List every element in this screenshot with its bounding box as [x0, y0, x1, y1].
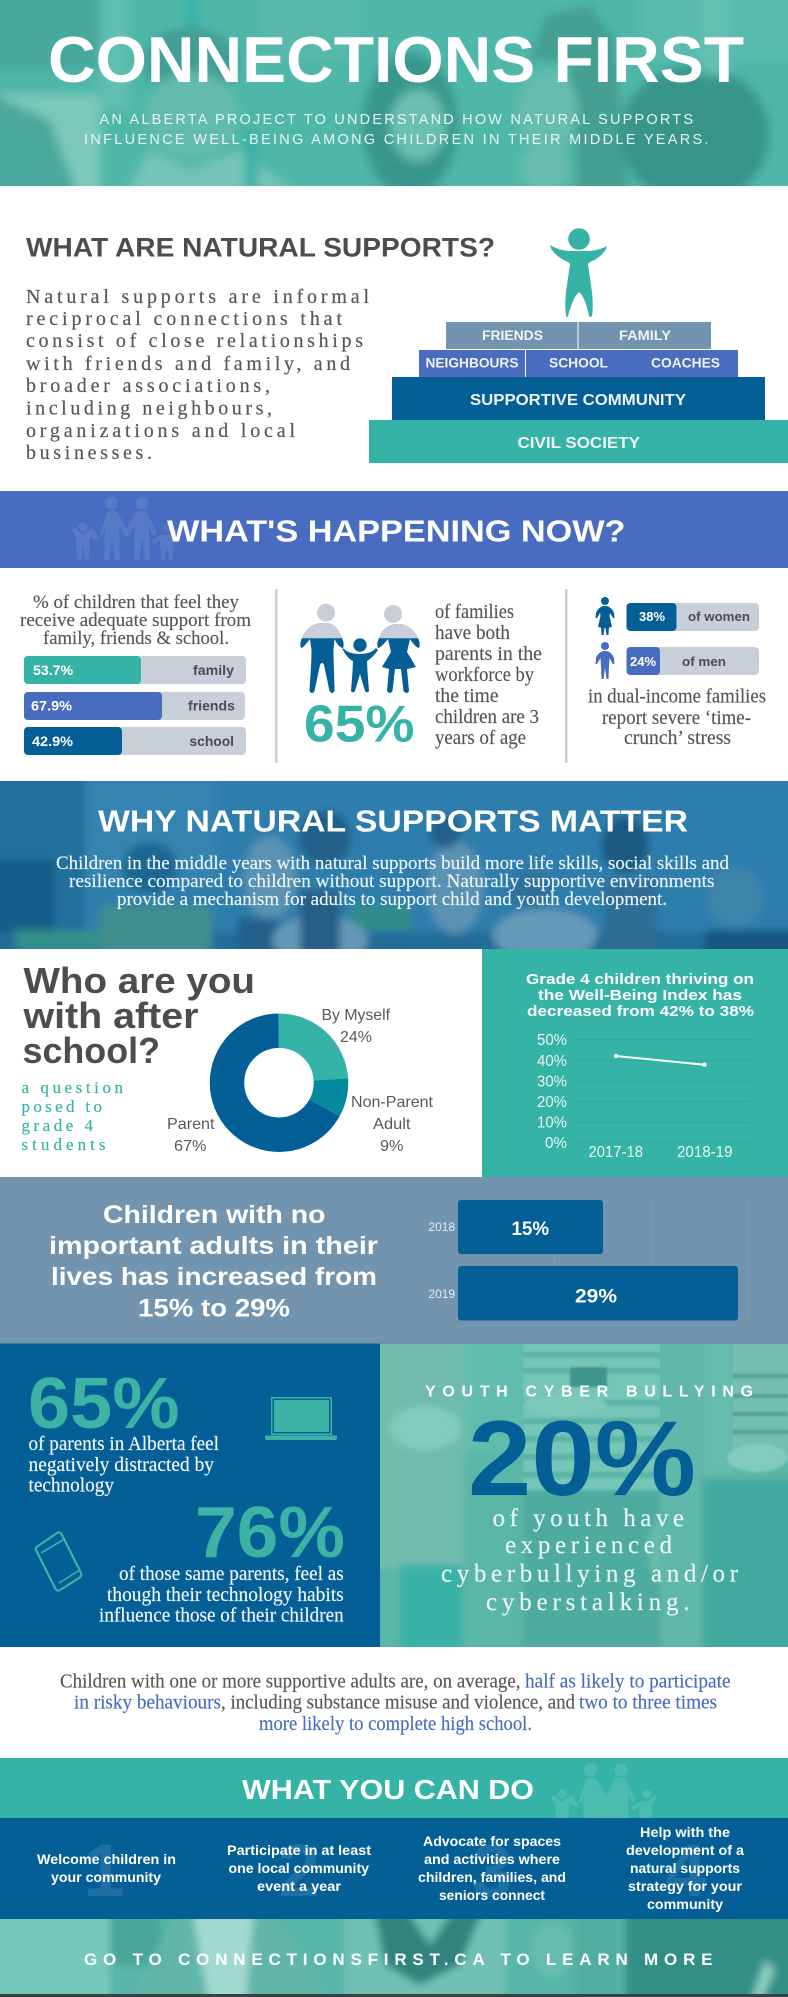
description: the time [435, 686, 498, 707]
action 1 [37, 1851, 176, 1885]
definition text: organizations and local [26, 420, 295, 442]
question note [22, 1078, 124, 1154]
heading: WHAT ARE NATURAL SUPPORTS? [26, 232, 495, 262]
bar: school: school [190, 734, 234, 749]
call to action: GO TO CONNECTIONSFIRST.CA TO LEARN MORE [84, 1950, 712, 1969]
bar chart: 2019 [428, 1289, 455, 1301]
support pyramid: SCHOOL [549, 356, 608, 370]
action 4: strategy for your [628, 1878, 743, 1894]
body text: resilience compared to children without support. Naturally supportive environments [69, 872, 714, 892]
cyber bullying photo background [380, 1344, 788, 1647]
bar: family: family [193, 663, 235, 678]
bar: friends: 67.9% [31, 698, 72, 714]
why section photo background [0, 781, 788, 949]
text: technology habits: of those same parents, feel as [119, 1564, 344, 1585]
description: cyberbullying and/or [441, 1560, 739, 1588]
text: technology habits: influence those of their children [99, 1606, 344, 1626]
statement: important adults in their [49, 1232, 378, 1260]
bar: family [24, 656, 246, 684]
stat: 20%: 20% [468, 1398, 696, 1518]
text: distracted: of parents in Alberta feel [28, 1434, 220, 1455]
bar: women: 38% [639, 609, 665, 624]
text block: supportive adults outcome: more likely to complete high school. [259, 1714, 532, 1735]
action 2: Participate in at least [227, 1842, 371, 1858]
question note: a question [22, 1078, 124, 1097]
subtitle: AN ALBERTA PROJECT TO UNDERSTAND HOW NATURAL SUPPORTS [100, 112, 693, 128]
text: distracted: negatively distracted by [28, 1455, 214, 1476]
panel: well-being index line chart [482, 949, 788, 1177]
statement: 15% to 29% [138, 1294, 290, 1322]
support pyramid: FRIENDS [482, 328, 543, 343]
donut labels: Adult [373, 1116, 411, 1133]
definition text: Natural supports are informal [26, 286, 369, 308]
definition text: reciprocal connections that [26, 308, 342, 330]
statement: lives has increased from [51, 1263, 377, 1291]
description: report severe ‘time- [602, 708, 751, 729]
body text [56, 854, 730, 910]
question note: posed to [22, 1097, 102, 1116]
chart axis labels: 40% [537, 1053, 567, 1070]
donut labels: By Myself [322, 1007, 391, 1024]
heading: WHAT'S HAPPENING NOW? [167, 514, 626, 548]
action 4: community [647, 1896, 723, 1912]
support pyramid: COACHES [651, 356, 720, 370]
definition text [26, 286, 369, 464]
statement [49, 1201, 378, 1322]
definition text: with friends and family, and [26, 353, 350, 375]
text block: supportive adults outcome: , including substance misuse and violence, and [221, 1692, 575, 1714]
icon: family with workforce fill [300, 604, 420, 693]
definition text: businesses. [26, 442, 152, 464]
heading: WHY NATURAL SUPPORTS MATTER [98, 805, 688, 839]
description: cyberstalking. [486, 1589, 690, 1616]
chart heading: Grade 4 children thriving on [526, 971, 754, 988]
description: of youth have [492, 1505, 684, 1532]
description: parents in the [435, 644, 542, 665]
subtitle: INFLUENCE WELL-BEING AMONG CHILDREN IN THEIR MIDDLE YEARS. [84, 132, 708, 148]
donut labels: 67% [174, 1138, 206, 1155]
bar: school [24, 727, 246, 755]
chart axis labels: 0% [545, 1135, 567, 1152]
icon: family watermark [551, 1764, 657, 1818]
panel: header banner [0, 0, 788, 186]
action 4: natural supports [630, 1860, 740, 1876]
action 4: development of a [626, 1842, 744, 1858]
support pyramid: SUPPORTIVE COMMUNITY [470, 392, 687, 409]
definition text: broader associations, [26, 375, 270, 397]
subtitle [84, 112, 708, 148]
panel: why natural supports matter [0, 781, 788, 949]
text block: supportive adults outcome: Children with one or more supportive adults are, on average, [60, 1672, 520, 1692]
bar: friends [24, 692, 245, 720]
panel: working parents [300, 602, 542, 754]
heading [22, 960, 255, 1071]
support pyramid [369, 322, 788, 463]
icon: laptop [265, 1397, 337, 1440]
description: in dual-income families [588, 686, 766, 708]
support pyramid: CIVIL SOCIETY [518, 435, 641, 452]
panel: what are natural supports [26, 228, 788, 464]
donut labels [167, 1007, 434, 1155]
bar chart: 29% [575, 1286, 617, 1308]
heading: with after [22, 995, 198, 1036]
heading: WHAT YOU CAN DO [242, 1774, 534, 1805]
heading: Who are you [24, 960, 255, 1001]
action 3: children, families, and [418, 1869, 566, 1885]
description: years of age [435, 728, 526, 749]
description [588, 686, 766, 749]
heading: school? [22, 1030, 160, 1071]
bar: men: 24% [630, 654, 656, 669]
watermark numbers: 4 [665, 1829, 707, 1912]
panel: youth cyber bullying [380, 1344, 788, 1647]
title: CONNECTIONS FIRST [48, 23, 744, 96]
donut labels: Non-Parent [351, 1094, 434, 1111]
action 3: Advocate for spaces [423, 1833, 561, 1849]
statement: Children with no [103, 1201, 326, 1229]
chart axis labels [537, 1032, 732, 1161]
panel: time-crunch stress [588, 597, 766, 749]
chart axis labels: 2017-18 [588, 1144, 643, 1161]
description [441, 1505, 739, 1616]
footer photo background [0, 1919, 788, 1994]
donut chart [227, 1031, 331, 1135]
bar: women: of women [688, 609, 750, 624]
text block: supportive adults outcome [60, 1672, 730, 1735]
question note: students [22, 1135, 106, 1154]
action 4 [626, 1824, 744, 1912]
watermark numbers: 2 [278, 1829, 320, 1912]
icon: man [596, 642, 614, 679]
description: experienced [505, 1532, 672, 1559]
bar: men: of men [682, 654, 726, 669]
icon: phone [36, 1532, 81, 1591]
chart axis labels: 2018-19 [677, 1144, 732, 1161]
stat: 65%: 65% [28, 1363, 180, 1444]
action 2 [227, 1842, 371, 1894]
stat: 65%: 65% [304, 696, 414, 754]
heading: YOUTH CYBER BULLYING [425, 1384, 753, 1401]
chart axis labels: 50% [537, 1032, 567, 1049]
chart axis labels: 20% [537, 1094, 567, 1111]
stat: 76%: 76% [195, 1493, 345, 1573]
description: children are 3 [435, 707, 539, 728]
body text: provide a mechanism for adults to support child and youth development. [117, 890, 667, 910]
panel: who are you with after school [22, 960, 434, 1155]
action 3: seniors connect [439, 1887, 545, 1903]
icon: family watermark [72, 496, 178, 560]
bar chart: 2018 [428, 1222, 455, 1234]
caption: receive adequate support from [20, 611, 252, 631]
text block: supportive adults outcome: two to three times [579, 1692, 717, 1714]
chart heading: the Well-Being Index has [538, 987, 742, 1004]
panel: no important adults [0, 1177, 788, 1344]
action 4: Help with the [640, 1824, 730, 1840]
donut labels: Parent [167, 1116, 215, 1133]
description: have both [435, 623, 510, 644]
bar chart [428, 1200, 738, 1320]
chart heading [526, 971, 754, 1020]
action 1: Welcome children in [37, 1851, 176, 1867]
panel: what you can do banner [0, 1758, 788, 1818]
definition text: including neighbours, [26, 398, 272, 420]
header photo background [0, 0, 788, 186]
panel: four actions [0, 1818, 788, 1919]
bar: family: 53.7% [33, 663, 73, 678]
bar: school: 42.9% [32, 734, 73, 749]
text: distracted: technology [28, 1476, 114, 1496]
description: workforce by [435, 665, 534, 686]
panel: parents and technology [0, 1344, 380, 1647]
caption: family, friends & school. [43, 629, 229, 649]
bar: men [626, 647, 759, 675]
text: distracted [28, 1434, 220, 1496]
panel: footer call to action [0, 1919, 788, 1994]
chart axis labels: 30% [537, 1074, 567, 1090]
body text: Children in the middle years with natural supports build more life skills, social skills and [56, 854, 730, 874]
watermark numbers [83, 1829, 707, 1912]
panel: children support bars [20, 593, 252, 755]
action 1: your community [51, 1869, 161, 1885]
action 3: and activities where [424, 1851, 560, 1867]
text block: supportive adults outcome: half as likely to participate [525, 1672, 730, 1692]
support pyramid: FAMILY [619, 328, 671, 343]
panel: what's happening now banner [0, 491, 788, 568]
bar: friends: friends [188, 698, 235, 714]
donut labels: 24% [340, 1029, 372, 1046]
support pyramid: NEIGHBOURS [426, 356, 518, 370]
caption: % of children that feel they [33, 593, 240, 613]
description [435, 602, 542, 749]
action 2: event a year [257, 1878, 342, 1894]
chart heading: decreased from 42% to 38% [527, 1003, 754, 1020]
icon: woman [596, 597, 614, 635]
bar chart: 15% [512, 1219, 549, 1240]
definition text: consist of close relationships [26, 330, 363, 352]
line series [614, 1054, 707, 1067]
watermark numbers: 1 [83, 1829, 125, 1912]
action 3 [418, 1833, 566, 1903]
description: crunch’ stress [624, 728, 731, 749]
chart axis labels: 10% [537, 1114, 567, 1132]
action 2: one local community [228, 1860, 369, 1876]
text: technology habits: though their technology habits [107, 1585, 344, 1606]
text block: supportive adults outcome: in risky behaviours [74, 1692, 221, 1714]
text: technology habits [99, 1564, 344, 1626]
description: of families [435, 602, 514, 623]
donut labels: 9% [380, 1138, 404, 1155]
caption [20, 593, 252, 649]
icon: person on pyramid [550, 228, 607, 317]
watermark numbers: 3 [471, 1829, 513, 1912]
bar: women [626, 603, 759, 631]
question note: grade 4 [22, 1116, 94, 1135]
